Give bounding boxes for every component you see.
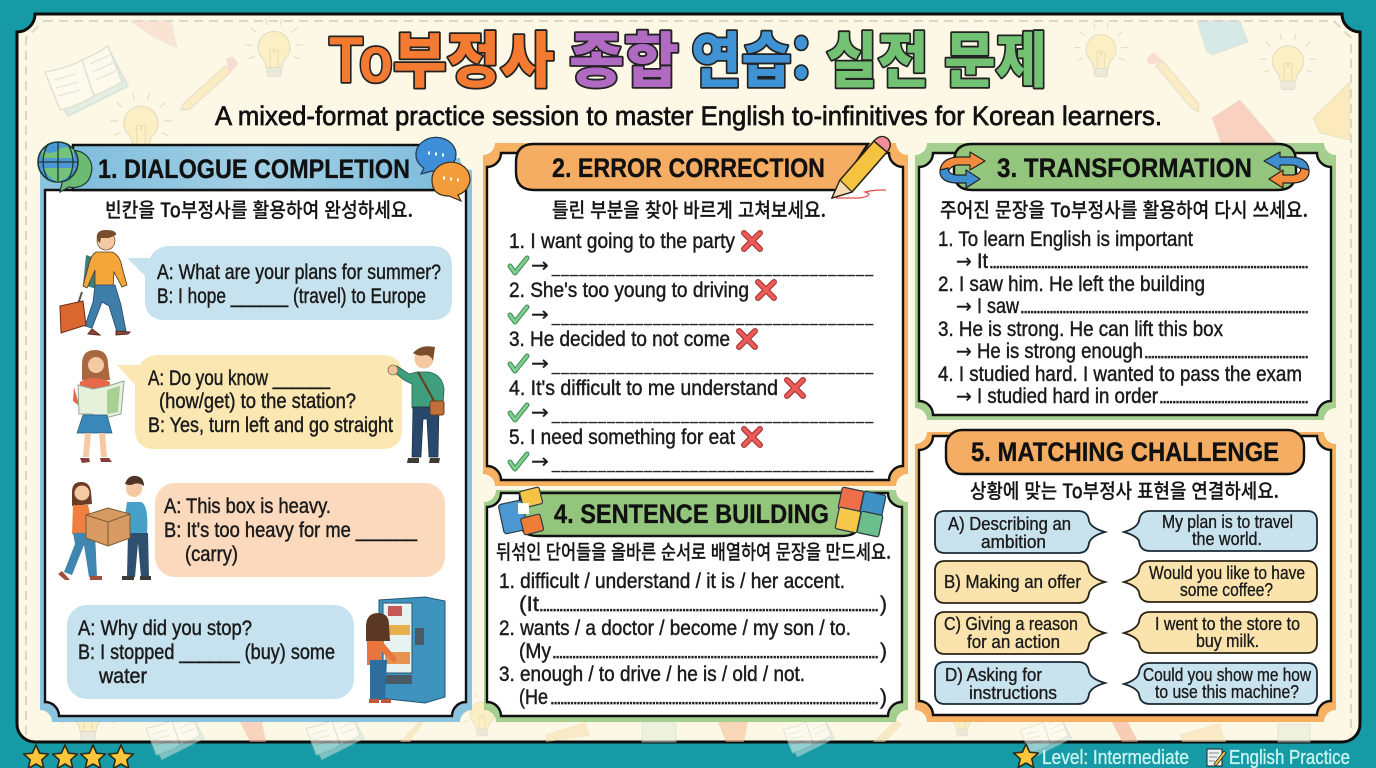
exercise list: 1. To learn English is important <box>938 228 1193 251</box>
exercise list: ................................................................................................... <box>989 253 1309 272</box>
exercise list: → <box>956 249 972 273</box>
dialogue 4: speech bubble <box>67 605 354 699</box>
exercise list: I studied hard in order <box>977 385 1158 408</box>
matching items right: the world. <box>1192 529 1262 549</box>
dialogue 3: speech bubble <box>155 483 445 577</box>
exercise list: (It <box>519 593 539 616</box>
matching items left: D) Asking for <box>945 665 1042 685</box>
heading: error correction <box>516 144 868 190</box>
matching items left: C) Giving a reason <box>944 614 1078 634</box>
exercise list: .................................................................................................... <box>550 689 879 708</box>
exercise list <box>938 228 1309 408</box>
instruction: 틀린 부분을 찾아 바르게 고쳐보세요. <box>552 194 826 223</box>
dialogue 3: speech bubble: B: It's too heavy for me ______ <box>164 519 417 542</box>
exercise list: → <box>956 384 972 408</box>
icon: pencil <box>832 136 890 198</box>
dialogue 4: speech bubble: B: I stopped ______ (buy) some <box>78 641 335 664</box>
title: 실전 문제 <box>826 13 1047 100</box>
exercise list <box>499 570 887 709</box>
exercise list: 2. wants / a doctor / become / my son / to. <box>499 617 851 640</box>
matching items right: I went to the store to <box>1155 614 1300 634</box>
exercise list: ) <box>880 593 887 616</box>
exercise list: ___________________________________ <box>551 456 873 472</box>
matching items right: buy milk. <box>1196 631 1259 651</box>
panel: 3 transformation <box>915 143 1336 420</box>
illustration: vending machine <box>366 597 445 703</box>
heading: transformation <box>954 144 1296 190</box>
exercise list: (He <box>519 686 548 709</box>
dialogue 2: speech bubble: A: Do you know ______ <box>148 367 330 390</box>
heading: dialogue completion <box>73 145 440 190</box>
matching items left: instructions <box>969 683 1057 703</box>
exercise list: ___________________________________ <box>551 407 873 423</box>
panel: 5 matching challenge <box>915 430 1336 722</box>
exercise list: .............................................. <box>1159 388 1309 407</box>
exercise list: 2. She's too young to driving <box>509 279 749 302</box>
exercise list: ...................................................................................................... <box>539 596 879 615</box>
footer: rating stars <box>24 745 133 768</box>
heading: sentence building: 4. SENTENCE BUILDING <box>554 499 829 529</box>
exercise list: 3. enough / to drive / he is / old / not. <box>499 663 805 686</box>
illustration: woman with map <box>73 350 124 463</box>
panel: 1 dialogue completion <box>38 137 472 722</box>
exercise list: 1. difficult / understand / it is / her accent. <box>499 570 845 593</box>
matching items right: My plan is to travel <box>1162 512 1293 532</box>
matching items left: A) Describing an <box>948 514 1071 534</box>
instruction: 상황에 맞는 To부정사 표현을 연결하세요. <box>970 475 1279 504</box>
subtitle: A mixed-format practice session to master English to-infinitives for Korean learners. <box>215 101 1162 131</box>
dialogue 1: speech bubble <box>127 246 452 320</box>
icon: puzzle pieces right <box>835 487 886 537</box>
matching items left <box>935 511 1105 704</box>
matching items right: to use this machine? <box>1155 682 1299 702</box>
instruction: 빈칸을 To부정사를 활용하여 완성하세요. <box>105 194 413 223</box>
title <box>329 13 1047 100</box>
illustration: man giving directions <box>388 346 444 463</box>
dialogue 1: speech bubble: B: I hope ______ (travel) to Europe <box>157 285 426 308</box>
heading: sentence building <box>520 493 860 536</box>
title: 종합 <box>569 13 679 100</box>
illustration: traveller with suitcase <box>60 230 130 335</box>
exercise list: → <box>956 339 972 363</box>
icon: puzzle pieces left <box>498 487 544 535</box>
exercise list: → <box>531 400 549 424</box>
exercise list: → <box>531 351 549 375</box>
exercise list: → <box>531 302 549 326</box>
exercise list: ......................................................................................... <box>1020 298 1309 317</box>
heading: transformation: 3. TRANSFORMATION <box>997 153 1252 183</box>
heading: dialogue completion: 1. DIALOGUE COMPLETION <box>98 154 410 184</box>
title: 부정사 <box>393 13 554 100</box>
exercise list: It <box>977 250 988 273</box>
instruction: 주어진 문장을 To부정사를 활용하여 다시 쓰세요. <box>940 194 1308 223</box>
exercise list: 4. It's difficult to me understand <box>509 377 778 400</box>
exercise list: → <box>531 253 549 277</box>
matching items left: B) Making an offer <box>944 572 1081 592</box>
exercise list: 4. I studied hard. I wanted to pass the exam <box>938 363 1302 386</box>
dialogue 3: speech bubble: A: This box is heavy. <box>164 495 331 518</box>
dialogue 2: speech bubble: B: Yes, turn left and go straight <box>148 414 393 437</box>
exercise list: → <box>531 449 549 473</box>
icon: chat bubbles <box>416 137 470 201</box>
exercise list: 3. He is strong. He can lift this box <box>938 318 1223 341</box>
title: 연습: <box>691 13 811 100</box>
exercise list <box>509 230 873 473</box>
exercise list: ................................................... <box>1144 343 1309 362</box>
exercise list: ___________________________________ <box>551 309 873 325</box>
heading: error correction: 2. ERROR CORRECTION <box>552 153 825 183</box>
dialogue 3: speech bubble: (carry) <box>185 543 238 566</box>
matching items right <box>1124 511 1317 704</box>
exercise list: ................................................................................................... <box>552 643 879 662</box>
icon: swap arrows left <box>940 152 985 188</box>
heading: matching challenge <box>946 430 1304 474</box>
exercise list: ___________________________________ <box>551 358 873 374</box>
matching items left: for an action <box>967 632 1060 652</box>
dialogue 1: speech bubble: A: What are your plans for summer? <box>157 261 441 284</box>
exercise list: I saw <box>977 295 1020 318</box>
dialogue 4: speech bubble: water <box>98 665 147 688</box>
icon: globe with speech bubble <box>38 142 92 192</box>
matching items left: ambition <box>981 532 1046 552</box>
exercise list: 3. He decided to not come <box>509 328 730 351</box>
icon: swap arrows right <box>1264 152 1309 188</box>
matching items right: Could you show me how <box>1143 665 1312 685</box>
instruction: 뒤섞인 단어들을 올바른 순서로 배열하여 문장을 만드세요. <box>496 536 891 565</box>
heading: matching challenge: 5. MATCHING CHALLENGE <box>971 437 1279 467</box>
exercise list: (My <box>519 640 551 663</box>
exercise list: 1. I want going to the party <box>509 230 735 253</box>
illustration: two people carrying a box <box>58 476 151 580</box>
exercise list: → <box>956 294 972 318</box>
exercise list: ___________________________________ <box>551 260 873 276</box>
dialogue 4: speech bubble: A: Why did you stop? <box>78 617 252 640</box>
title: To <box>329 23 393 96</box>
panel: 4 sentence building <box>484 487 908 722</box>
matching items right: Would you like to have <box>1149 563 1305 583</box>
exercise list: 2. I saw him. He left the building <box>938 273 1205 296</box>
dialogue 2: speech bubble <box>117 355 402 449</box>
exercise list: ) <box>880 640 887 663</box>
panel: 2 error correction <box>483 136 908 486</box>
dialogue 2: speech bubble: (how/get) to the station? <box>159 390 356 413</box>
exercise list: 5. I need something for eat <box>509 426 735 449</box>
footer: level label <box>1014 744 1189 768</box>
matching items right: some coffee? <box>1180 580 1273 600</box>
exercise list: ) <box>880 686 887 709</box>
exercise list: He is strong enough <box>977 340 1143 363</box>
